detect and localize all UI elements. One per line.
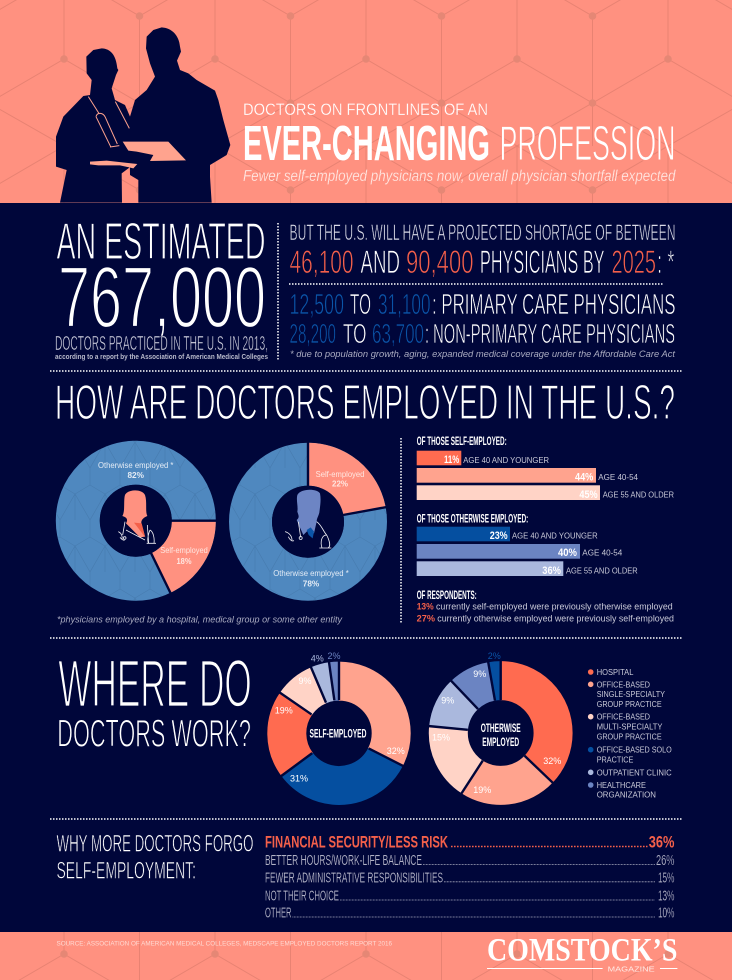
panel: estimated doctors statistic [55, 213, 268, 361]
slice percentages: 4% [311, 654, 324, 664]
panel: of respondents [417, 589, 674, 624]
bar: age 55 and older 45%: 45% [579, 489, 598, 501]
bar: age 40-54 40%: 40% [558, 547, 577, 559]
slice percentages: 9% [441, 696, 454, 706]
bar: age 55 and older 45%: AGE 55 AND OLDER [603, 490, 674, 500]
legend: workplace types: HOSPITAL [597, 667, 634, 677]
footnote: * due to population growth, aging, expanded medical coverage under the Affordable Care Act [290, 349, 676, 359]
text: self-employed previously otherwise employed: 13% [417, 602, 434, 612]
panel: footer band [0, 932, 732, 980]
legend: workplace types: SINGLE-SPECIALTY [597, 689, 665, 699]
chart: male doctors donut [250, 441, 388, 588]
icon: female doctor [118, 490, 156, 543]
label: otherwise employed 78%: Otherwise employed * [273, 568, 349, 578]
slice percentages: 32% [543, 756, 561, 766]
icon: male doctor [285, 490, 331, 548]
text: self-employed previously otherwise employed: currently self-employed were previously otherwise employed [436, 602, 673, 612]
bar: age 40 and younger 23% [417, 527, 598, 542]
text: doctors practiced: DOCTORS PRACTICED IN THE U.S. IN 2013, [55, 333, 268, 355]
heading: of those self-employed: OF THOSE SELF-EMPLOYED: [417, 435, 507, 448]
primary care line: TO [350, 289, 371, 321]
label: self-employed 22%: Self-employed [316, 469, 365, 479]
text: otherwise employed previously self-employed: currently otherwise employed were previously self-employed [437, 614, 674, 624]
slice percentages: 9% [473, 669, 486, 679]
label: self-employed 18%: Self-employed [160, 545, 208, 555]
panel: age bars self-employed [417, 435, 674, 501]
text: source note: according to a report by the Association of American Medical Colleges [55, 352, 268, 361]
chart: self-employed workplace donut [266, 651, 412, 806]
legend: workplace types [588, 667, 672, 800]
label: otherwise employed 82% [98, 460, 174, 480]
label: self-employed 22%: 22% [332, 478, 349, 488]
primary care line: 12,500 [290, 289, 344, 321]
title: ever-changing: EVER-CHANGING [243, 117, 490, 171]
bar: age 40 and younger 11% [417, 451, 549, 466]
panel: age bars otherwise employed [417, 512, 638, 577]
panel: projected shortage [289, 220, 676, 359]
shortage range line: PHYSICIANS BY [480, 244, 604, 280]
reason: better hours 26%: BETTER HOURS/WORK-LIFE BALANCE [265, 853, 422, 869]
label: otherwise employed 78% [273, 568, 349, 588]
bar: age 55 and older 45% [417, 485, 674, 501]
label: otherwise employed 82%: 82% [127, 470, 144, 480]
reason: financial security 36%: 36% [649, 832, 674, 852]
bar: age 40 and younger 11%: AGE 40 AND YOUNGER [463, 455, 549, 465]
note: physicians employed definition: *physicians employed by a hospital, medical group or some other entity [57, 614, 343, 626]
slice percentages: 15% [432, 732, 450, 742]
shortage range line: : * [657, 244, 674, 280]
heading: where do doctors work [57, 647, 252, 756]
bar: age 40-54 40%: AGE 40-54 [582, 548, 623, 558]
heading: where do doctors work: DOCTORS WORK? [57, 713, 251, 756]
logo: comstock's magazine: COMSTOCK’S [487, 933, 677, 969]
slice percentages: 19% [275, 706, 293, 716]
slice percentages: 31% [290, 774, 308, 784]
heading: an estimated: AN ESTIMATED [56, 213, 266, 271]
heading: of respondents: OF RESPONDENTS: [417, 589, 477, 602]
slice percentages [275, 651, 405, 784]
reason: not their choice 13%: 13% [658, 889, 674, 905]
bar: age 40-54 40% [417, 544, 623, 559]
legend: workplace types: MULTI-SPECIALTY [597, 722, 663, 732]
non-primary care line: TO [343, 318, 366, 349]
legend: workplace types: GROUP PRACTICE [597, 699, 662, 709]
slice percentages: 9% [298, 676, 312, 686]
shortage range line: AND [360, 244, 400, 280]
reason: other 10%: 10% [658, 906, 674, 922]
reason: fewer administrative responsibilities 15%: 15% [658, 870, 674, 886]
shortage range line [290, 244, 674, 280]
slice percentages: 32% [387, 746, 405, 756]
reason: not their choice 13%: NOT THEIR CHOICE [265, 889, 339, 905]
reason: financial security 36%: FINANCIAL SECURITY/LESS RISK [265, 832, 448, 852]
label: otherwise employed 78%: 78% [303, 578, 320, 588]
reason: not their choice 13% [265, 889, 674, 905]
illustration: two doctors silhouette [56, 27, 230, 203]
panel: header band [0, 0, 732, 203]
legend: workplace types: ORGANIZATION [597, 790, 656, 800]
chart: otherwise employed workplace donut [427, 651, 575, 807]
slice percentages: 19% [473, 785, 491, 795]
bar: age 40-54 44%: 44% [575, 471, 593, 483]
heading: why more doctors forgo self-employment: SELF-EMPLOYMENT: [56, 857, 196, 884]
legend: workplace types: OUTPATIENT CLINIC [597, 767, 672, 777]
heading: where do doctors work: WHERE DO [58, 647, 252, 722]
legend: workplace types: HEALTHCARE [597, 780, 646, 790]
reason: better hours 26%: 26% [656, 853, 674, 869]
primary care line [290, 289, 676, 321]
slice percentages: 2% [488, 651, 501, 661]
subtitle: Fewer self-employed physicians now, overall physician shortfall expected [243, 168, 677, 185]
big number: 767,000: 767,000 [58, 249, 266, 346]
legend: workplace types: OFFICE-BASED [597, 679, 650, 689]
label: otherwise employed 82%: Otherwise employed * [98, 460, 174, 470]
non-primary care line: 28,200 [290, 318, 336, 349]
non-primary care line [290, 318, 675, 349]
shortage range line: 46,100 [290, 244, 354, 280]
bar: age 40 and younger 23%: 23% [490, 530, 508, 542]
center label: otherwise employed: EMPLOYED [482, 736, 519, 749]
label: self-employed 22% [316, 469, 365, 488]
reason: other 10%: OTHER [265, 906, 292, 922]
shortage range line: 2025 [612, 244, 656, 280]
center label: otherwise employed: OTHERWISE [481, 722, 521, 735]
legend: workplace types: PRACTICE [597, 754, 634, 764]
list: reasons for forgoing self-employment [265, 832, 674, 922]
bar: age 40-54 44%: AGE 40-54 [598, 472, 638, 482]
text: otherwise employed previously self-employed: 27% [417, 614, 435, 624]
center label: self-employed: SELF-EMPLOYED [310, 728, 366, 740]
logo: comstock's magazine: MAGAZINE [608, 964, 655, 974]
legend: workplace types: OFFICE-BASED [597, 712, 650, 722]
bar: age 55 and older 36%: AGE 55 AND OLDER [566, 565, 638, 575]
bar: age 40 and younger 11%: 11% [444, 454, 459, 466]
title: doctors on frontlines of an: DOCTORS ON FRONTLINES OF AN [243, 101, 488, 119]
heading: of those otherwise employed: OF THOSE OTHERWISE EMPLOYED: [417, 512, 528, 525]
slice percentages: 2% [327, 651, 341, 661]
source text: SOURCE: ASSOCIATION OF AMERICAN MEDICAL COLLEGES, MEDSCAPE EMPLOYED DOCTORS REPORT 2016 [56, 940, 392, 947]
reason: financial security 36% [265, 832, 674, 852]
label: self-employed 18%: 18% [176, 556, 192, 566]
chart: female doctors donut [78, 460, 217, 593]
non-primary care line: 63,700 [372, 318, 424, 349]
legend: workplace types: OFFICE-BASED SOLO [597, 745, 672, 755]
heading: why more doctors forgo self-employment [56, 831, 253, 884]
bar: age 55 and older 36%: 36% [542, 565, 561, 577]
primary care line: 31,100 [378, 289, 430, 321]
bar: age 40 and younger 23%: AGE 40 AND YOUNGER [512, 530, 598, 540]
center label: otherwise employed [481, 722, 521, 749]
slice percentages [432, 651, 561, 795]
reason: better hours 26% [265, 853, 674, 869]
shortage range line: 90,400 [406, 244, 474, 280]
bar: age 55 and older 36% [417, 561, 638, 577]
legend: workplace types: GROUP PRACTICE [597, 732, 662, 742]
label: self-employed 18% [160, 545, 208, 566]
heading: why more doctors forgo self-employment: WHY MORE DOCTORS FORGO [56, 831, 253, 858]
reason: other 10% [265, 906, 674, 922]
bar: age 40-54 44% [417, 468, 638, 483]
reason: fewer administrative responsibilities 15%: FEWER ADMINISTRATIVE RESPONSIBILITIES [265, 870, 443, 886]
